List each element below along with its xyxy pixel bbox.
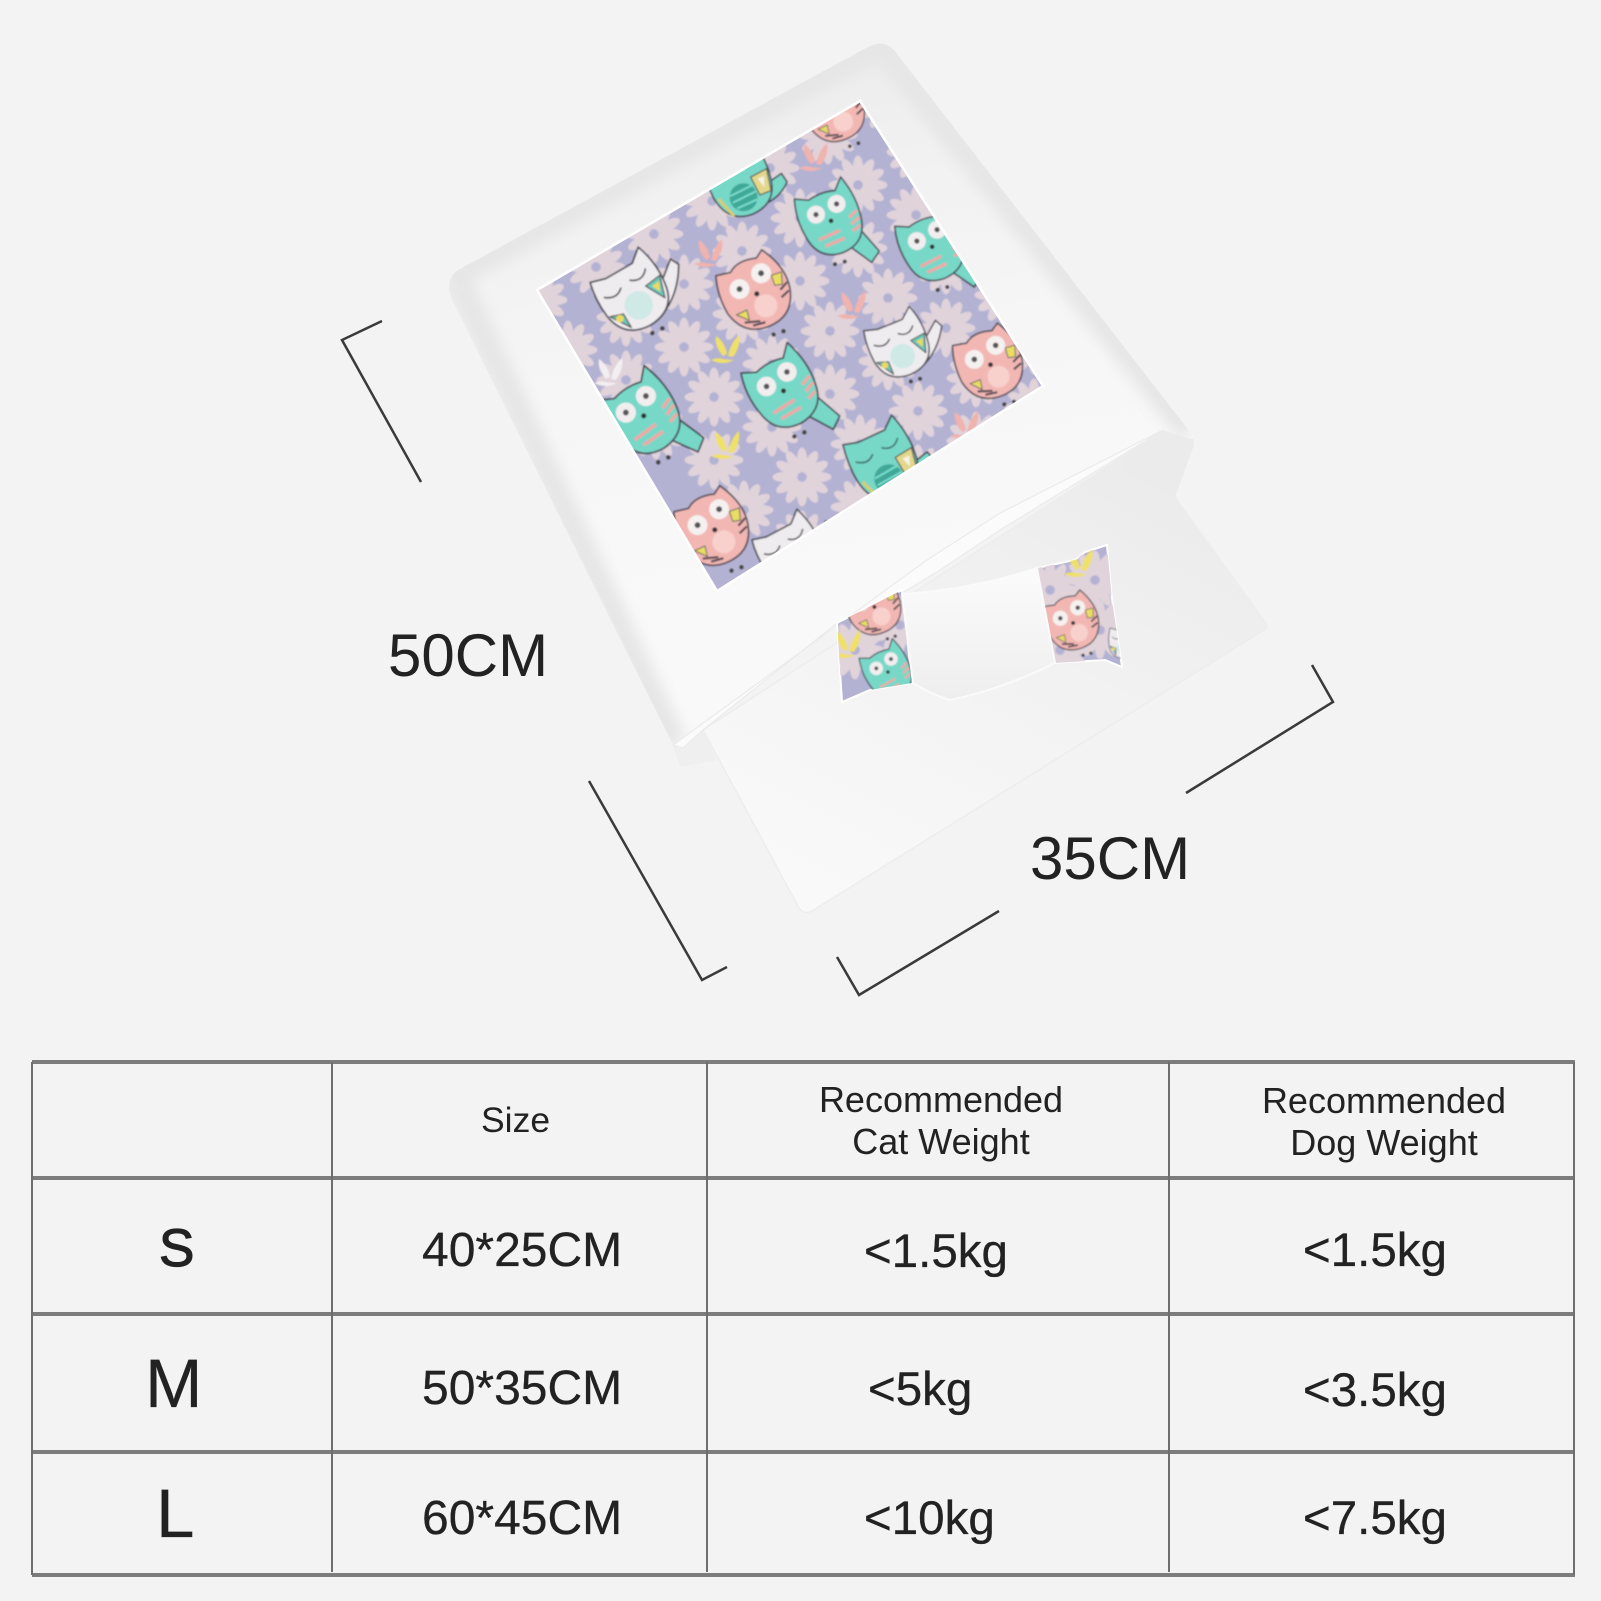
dimension bracket: right	[1186, 665, 1333, 793]
table header: Size	[481, 1100, 550, 1140]
dimension bracket: bottom	[837, 911, 999, 995]
pillow white band	[902, 568, 1055, 700]
row L: <10kg	[864, 1492, 995, 1545]
table grid	[32, 1062, 1575, 1575]
row M: M	[145, 1345, 202, 1422]
bottom flap tip	[673, 730, 717, 767]
product illustration: pet sleeping bag	[450, 44, 1186, 740]
table header	[481, 1079, 1506, 1163]
pocket back rim	[1120, 430, 1194, 497]
row L: <7.5kg	[1303, 1492, 1447, 1545]
table header: Dog Weight	[1290, 1122, 1478, 1163]
table header: Recommended	[819, 1079, 1063, 1120]
row M: <5kg	[868, 1363, 972, 1416]
row S	[159, 1219, 1447, 1278]
row M: 50*35CM	[422, 1362, 622, 1415]
row L: 60*45CM	[422, 1492, 622, 1545]
row M: <3.5kg	[1303, 1364, 1447, 1417]
row M	[145, 1345, 1447, 1422]
sleeping owls	[584, 130, 958, 604]
daisy pattern	[538, 110, 1040, 536]
table header: Cat Weight	[852, 1121, 1030, 1162]
owl fabric panel	[536, 100, 1044, 590]
top flap of the sleeping bag	[449, 44, 1193, 745]
row S: 40*25CM	[422, 1224, 622, 1277]
teal owls	[592, 173, 984, 484]
dimension label: 35CM: 35CM	[1030, 825, 1190, 892]
small pillow	[836, 544, 1123, 703]
size table	[32, 1062, 1575, 1575]
dimension label: 50CM: 50CM	[388, 622, 548, 689]
row S: S	[159, 1219, 194, 1278]
row L: L	[156, 1475, 194, 1552]
row S: <1.5kg	[1303, 1224, 1447, 1277]
leaf motifs	[594, 143, 978, 459]
lower sheet of the sleeping bag	[703, 430, 1267, 912]
flap fold band	[673, 430, 1163, 748]
row L	[156, 1475, 1447, 1552]
row S: <1.5kg	[864, 1225, 1008, 1278]
dimension bracket: bottom left	[589, 781, 727, 980]
pink owls	[667, 70, 1037, 587]
flap edge shading	[455, 45, 1190, 745]
table header: Recommended	[1262, 1080, 1506, 1121]
dimension bracket: top left	[342, 321, 421, 482]
